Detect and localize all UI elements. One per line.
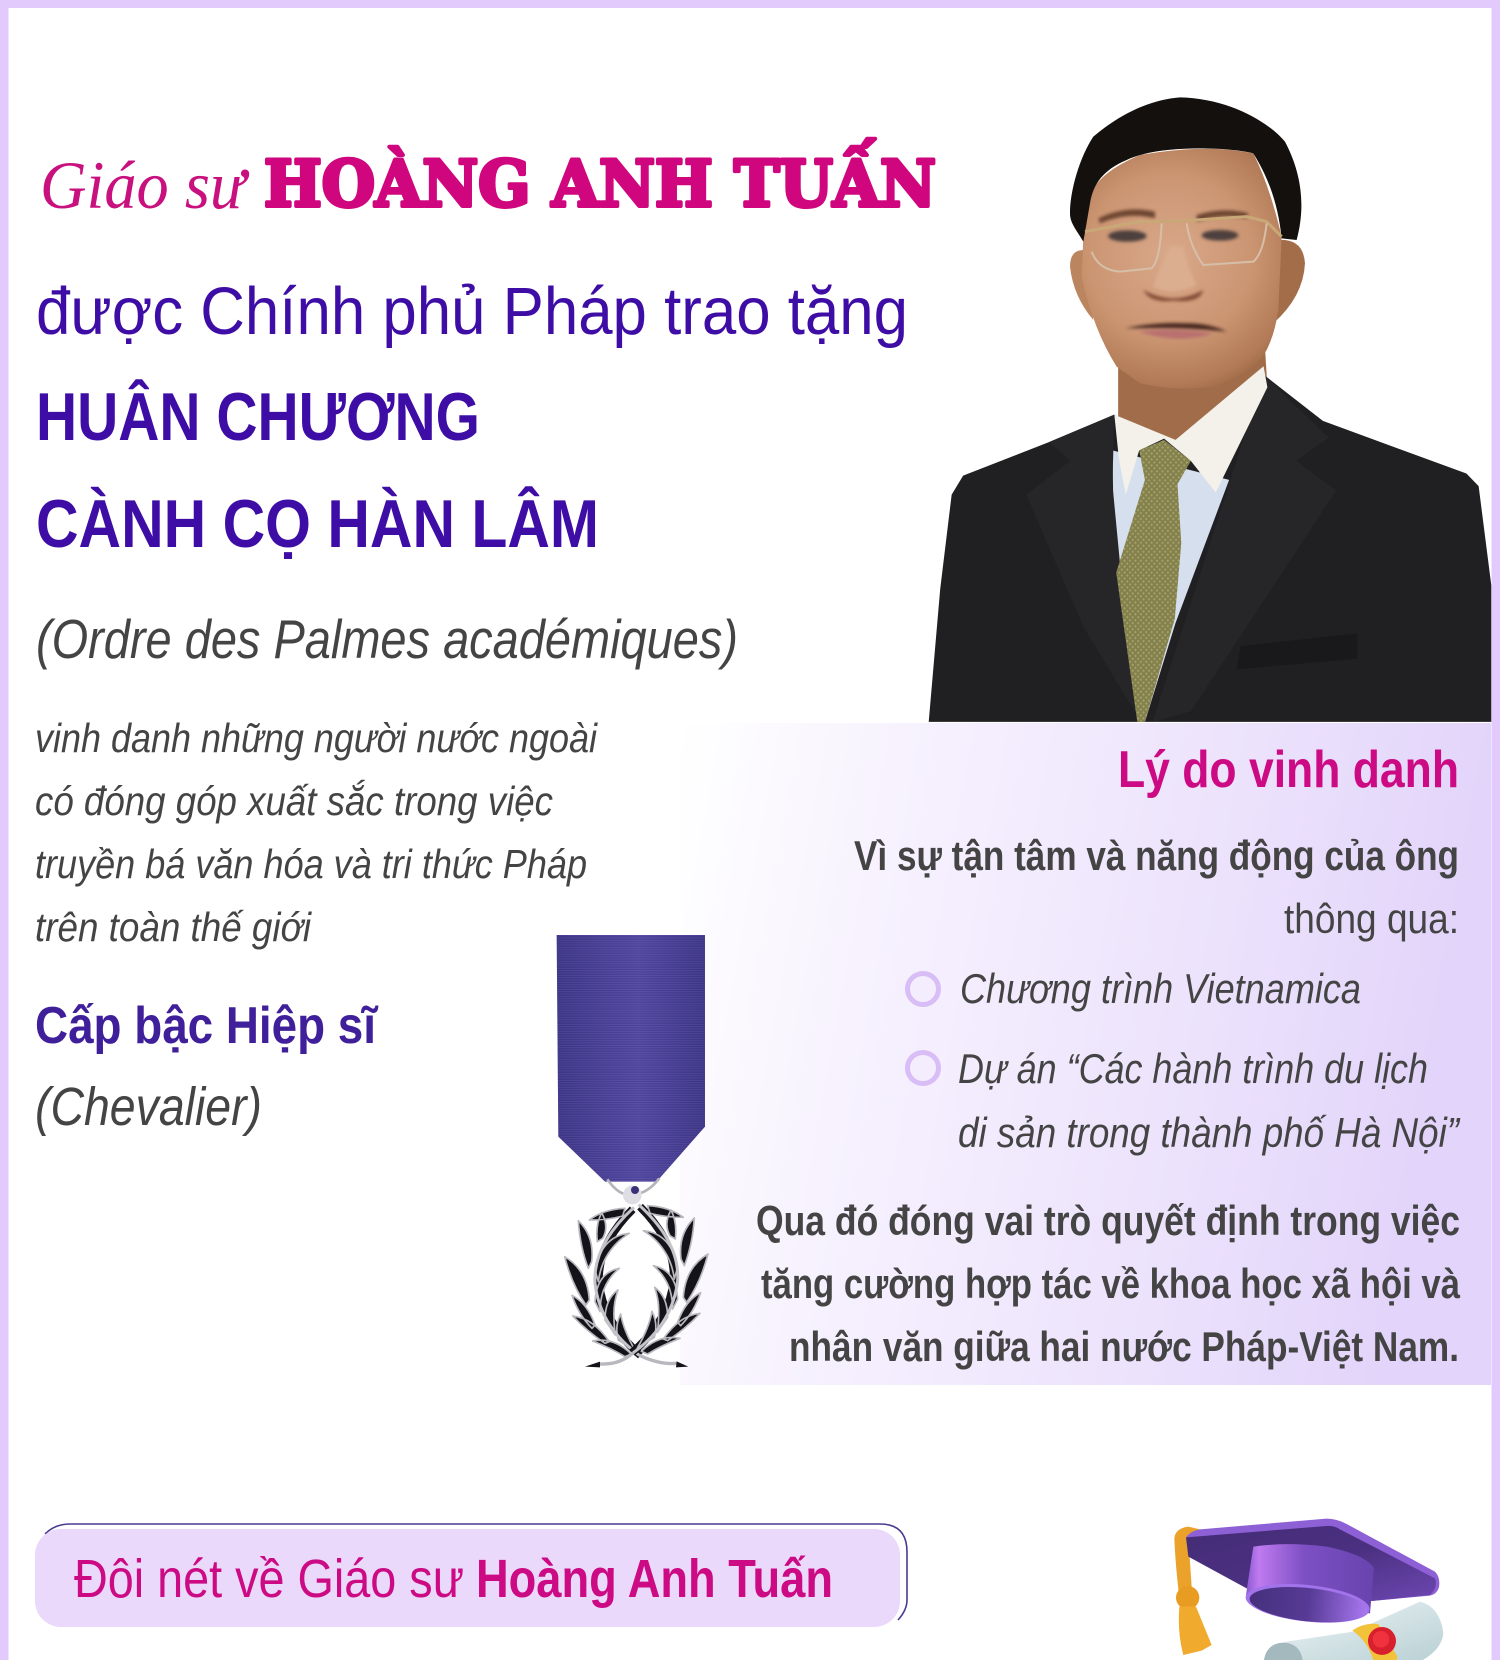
- title: professor name: Giáo sư: [40, 147, 250, 223]
- reason intro: thông qua:: [1284, 895, 1459, 942]
- collar: [1114, 366, 1267, 495]
- torso: [929, 324, 1491, 722]
- section banner: Hoàng Anh Tuấn: [476, 1549, 833, 1609]
- left ear: [1070, 250, 1093, 320]
- tassel: [1174, 1527, 1200, 1592]
- left lapel: [1026, 415, 1141, 722]
- head: [1070, 97, 1305, 389]
- diploma: [1267, 1602, 1443, 1660]
- shirt: [1112, 450, 1229, 722]
- diploma band and seal: [1352, 1624, 1397, 1660]
- description text: [35, 715, 599, 950]
- section banner: Đôi nét về Giáo sư: [74, 1549, 464, 1609]
- heading: award statement: [36, 274, 908, 562]
- cap opening: [1244, 1579, 1372, 1628]
- bullet list: Dự án “Các hành trình du lịch: [958, 1045, 1428, 1092]
- icon: graduation cap and diploma: [1174, 1519, 1443, 1660]
- ribbon: [557, 935, 705, 1182]
- rank: (Chevalier): [35, 1077, 262, 1137]
- right ear: [1273, 240, 1305, 323]
- cap crown: [1246, 1544, 1374, 1613]
- neck: [1118, 324, 1267, 446]
- conclusion text: [756, 1197, 1461, 1370]
- description text: có đóng góp xuất sắc trong việc: [35, 778, 553, 824]
- tie: [1116, 440, 1191, 722]
- description text: trên toàn thế giới: [35, 904, 313, 950]
- French order name: (Ordre des Palmes académiques): [36, 608, 738, 670]
- description text: truyền bá văn hóa và tri thức Pháp: [35, 841, 587, 887]
- title: professor name: HOÀNG ANH TUẤN: [264, 139, 936, 222]
- bullet list: [908, 965, 1461, 1156]
- section banner: [35, 1524, 907, 1627]
- facial features: [1098, 209, 1248, 339]
- bullet list: Chương trình Vietnamica: [960, 965, 1361, 1012]
- cap board: [1186, 1526, 1436, 1601]
- palm wreath and ring: [565, 1178, 708, 1367]
- heading: award statement: được Chính phủ Pháp trao tặng: [36, 274, 908, 349]
- heading: award statement: CÀNH CỌ HÀN LÂM: [36, 485, 599, 562]
- portrait photo: [929, 97, 1491, 722]
- hair: [1070, 97, 1301, 242]
- right lapel: [1153, 375, 1336, 722]
- medal: Palmes académiques: [557, 935, 708, 1367]
- panel: reason for honour: [680, 723, 1491, 1385]
- jacket: [929, 375, 1491, 722]
- heading: award statement: HUÂN CHƯƠNG: [36, 378, 480, 455]
- cap board rim: [1186, 1519, 1439, 1601]
- face: [1082, 149, 1282, 389]
- rank: [35, 997, 379, 1137]
- pocket: [1237, 633, 1357, 669]
- glasses: [1085, 217, 1282, 272]
- description text: vinh danh những người nước ngoài: [35, 715, 599, 761]
- title: professor name: [40, 139, 936, 223]
- rank: Cấp bậc Hiệp sĩ: [35, 997, 379, 1055]
- reason intro: [854, 832, 1459, 942]
